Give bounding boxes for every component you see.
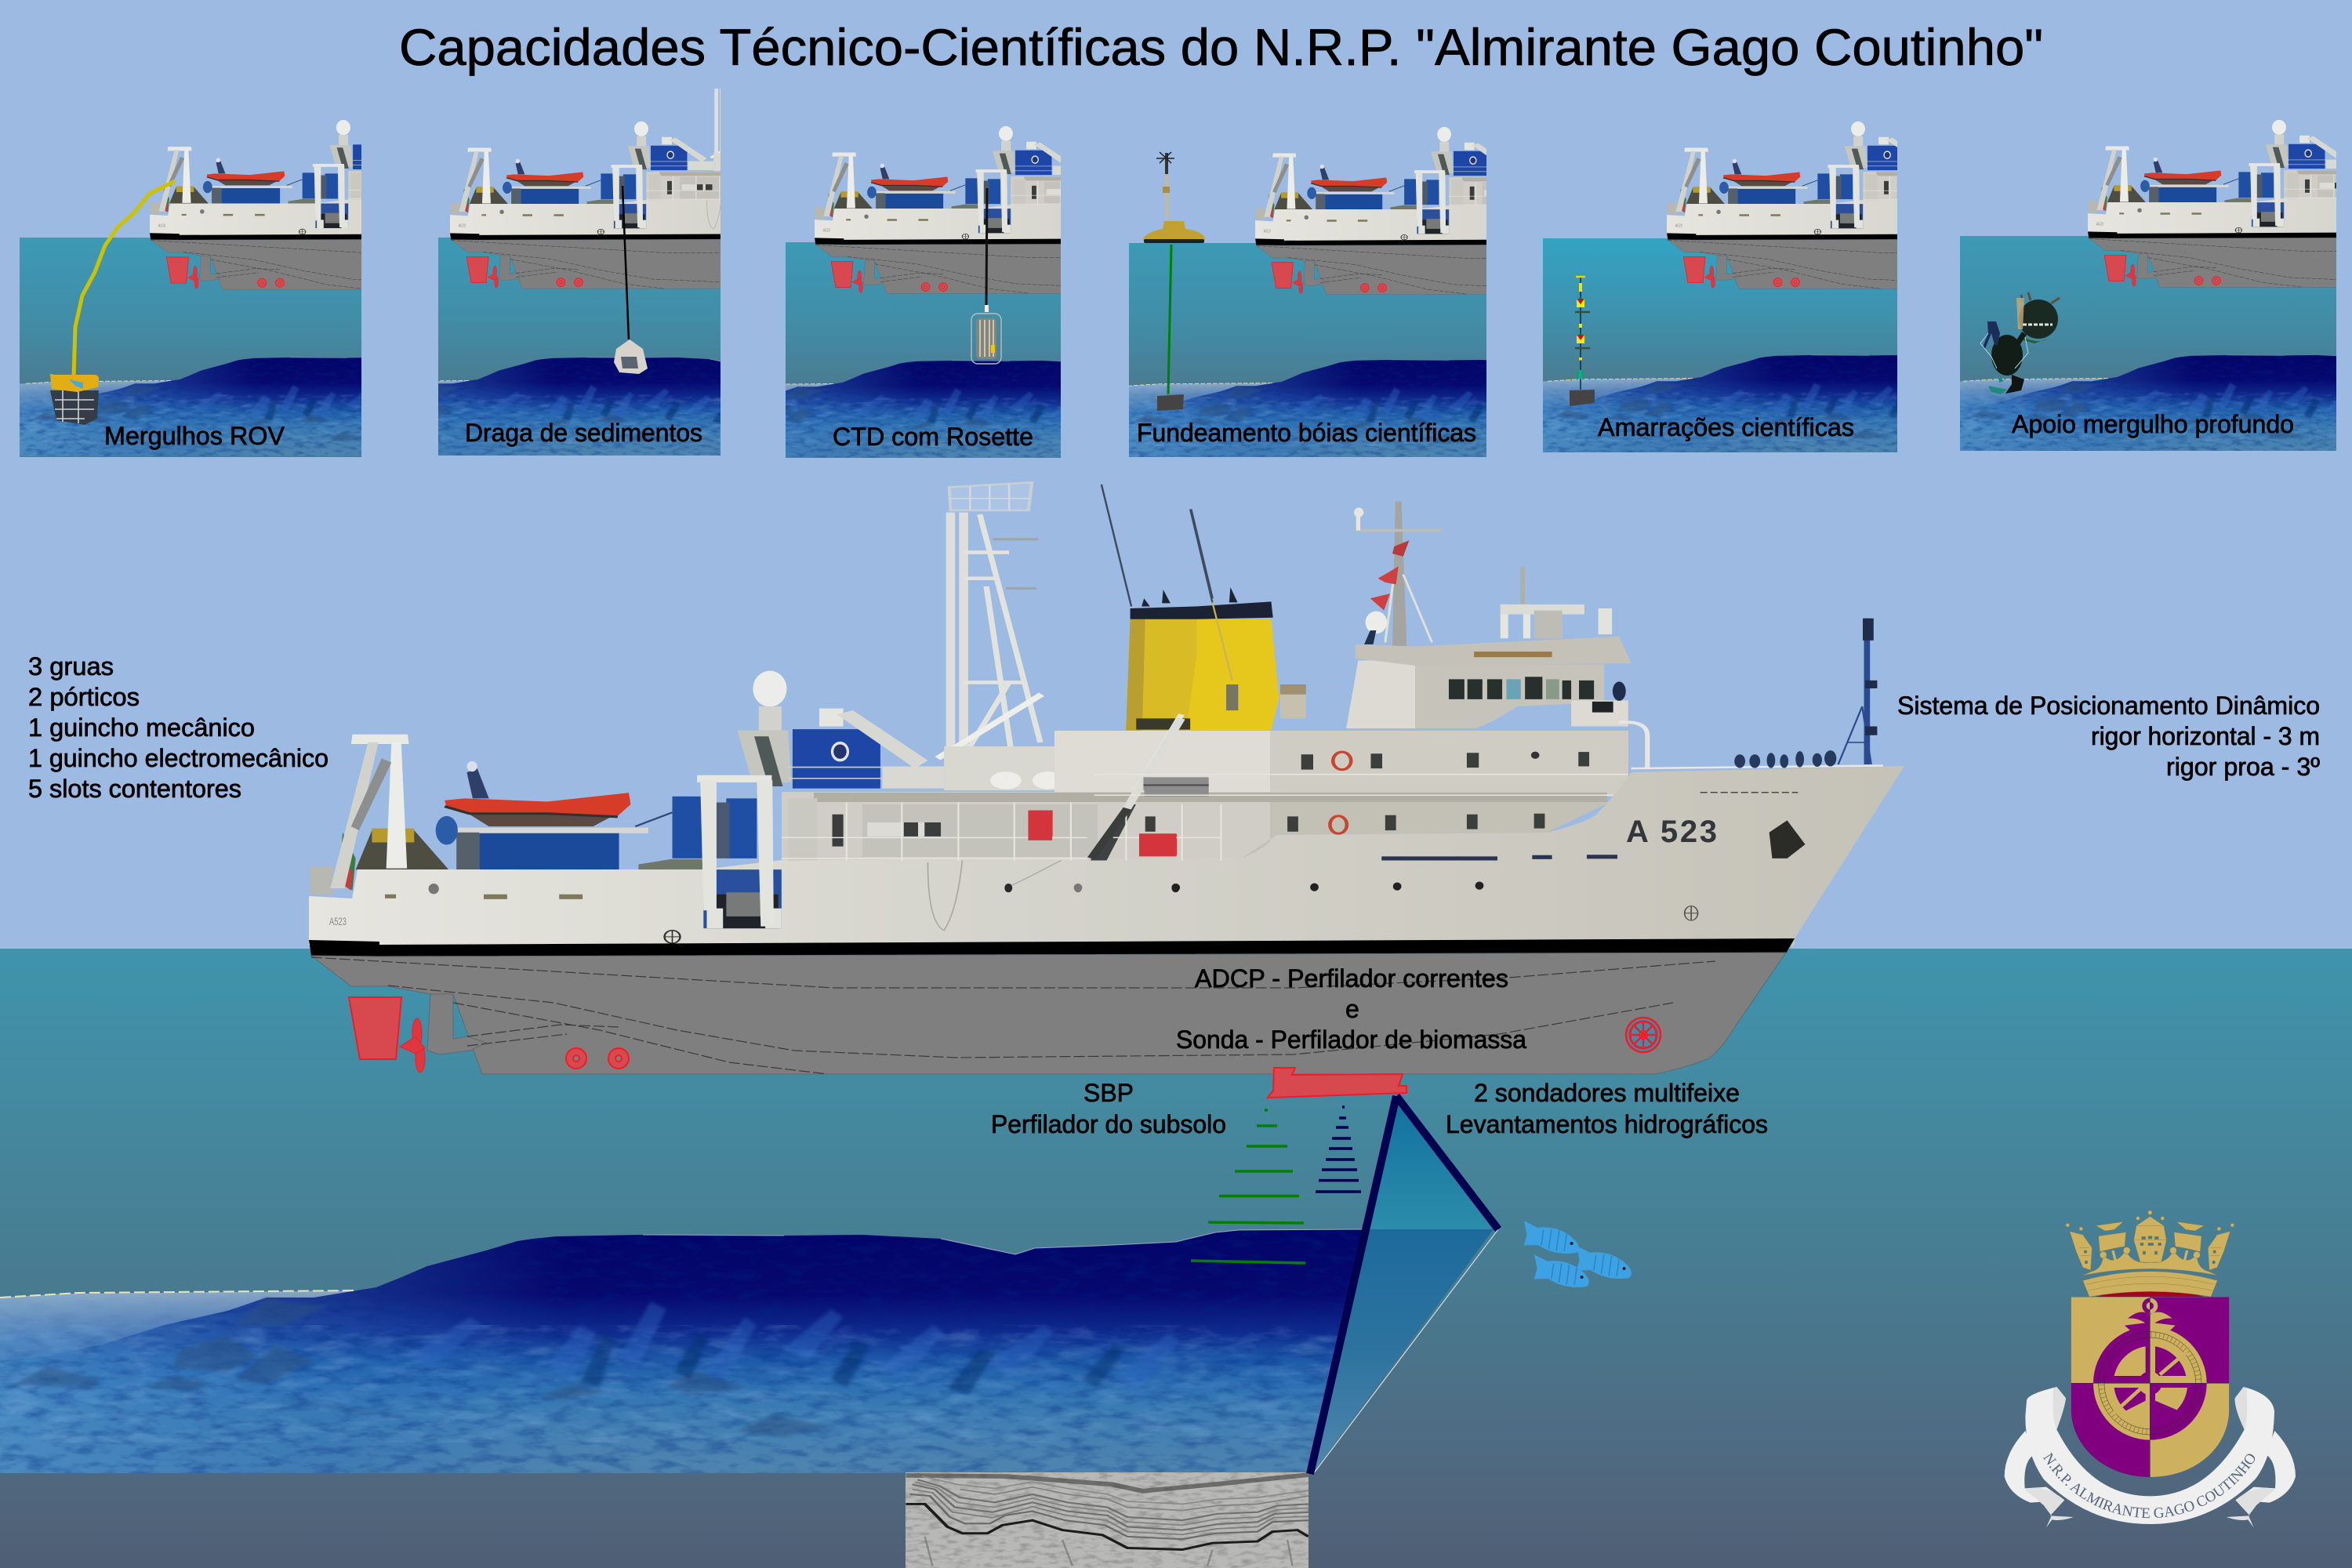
text block: SBP bbox=[991, 1079, 1226, 1138]
text block: SBP: Perfilador do subsolo bbox=[991, 1110, 1226, 1138]
panel label: Apoio mergulho profundo bbox=[2012, 410, 2294, 438]
icon: yellow ROV umbilical bbox=[74, 181, 175, 376]
main ship with hull and superstructure bbox=[309, 482, 1904, 1074]
emblem: ship coat of arms bbox=[2004, 1210, 2296, 1527]
bow thruster bbox=[1626, 1018, 1661, 1052]
text block: deck equipment list: 5 slots contentores bbox=[28, 775, 241, 803]
icon: sediment grab bbox=[614, 339, 648, 374]
panel: CTD com Rosette bbox=[786, 125, 1061, 458]
biomass sonar pulses (navy) bbox=[1316, 1107, 1361, 1192]
icon: anchor weight bbox=[1157, 394, 1184, 411]
stern name A523: A523 bbox=[329, 915, 347, 927]
rudder bbox=[349, 997, 401, 1059]
naval crown bbox=[2066, 1210, 2234, 1297]
icon: ROV vehicle bbox=[50, 374, 99, 425]
icon: instrumented mooring line bbox=[1575, 276, 1590, 390]
panel: Mergulhos ROV bbox=[20, 120, 361, 457]
RIB boat and stern deck gear bbox=[470, 815, 615, 826]
text block: dynamic positioning: Sistema de Posicionamento Dinâmico bbox=[1897, 691, 2320, 720]
text block: ADCP and biomass sonar: e bbox=[1345, 995, 1359, 1023]
icon: CTD wire bbox=[986, 188, 987, 306]
text block: multibeam sounders: Levantamentos hidrográficos bbox=[1446, 1110, 1768, 1138]
text block: deck equipment list: 2 pórticos bbox=[28, 683, 140, 711]
text block: multibeam sounders bbox=[1446, 1079, 1768, 1138]
icon: divers with mine bbox=[1980, 292, 2060, 394]
propeller bbox=[400, 1018, 425, 1073]
underwater hull bbox=[311, 953, 1786, 1074]
panel label: CTD com Rosette bbox=[833, 423, 1033, 451]
sonar pod bbox=[1268, 1068, 1406, 1098]
shield quartered gold and purple bbox=[2071, 1297, 2229, 1477]
text block: dynamic positioning: rigor horizontal - 3 m bbox=[2091, 722, 2320, 750]
hull construction lines bbox=[311, 957, 1715, 1074]
stern thrusters bbox=[566, 1048, 629, 1069]
stern A-frame gantry bbox=[351, 735, 409, 744]
icon: scientific buoy bbox=[1143, 152, 1205, 243]
panel label: Amarrações científicas bbox=[1598, 413, 1854, 441]
fish shoal bbox=[1520, 1221, 1634, 1290]
title: Capacidades Técnico-Científicas do N.R.P. "Almirante Gago Coutinho" bbox=[399, 18, 2043, 76]
text block: ADCP and biomass sonar bbox=[1176, 964, 1526, 1054]
panel label: Draga de sedimentos bbox=[465, 419, 702, 447]
text block: SBP: SBP bbox=[1083, 1079, 1134, 1107]
hull number A 523: A 523 bbox=[1626, 815, 1717, 849]
text block: dynamic positioning bbox=[1897, 691, 2320, 781]
icon: mooring line bbox=[1168, 245, 1171, 394]
after containers and second gantry bbox=[673, 797, 703, 858]
icon: anchor weight bbox=[1570, 390, 1595, 406]
text block: deck equipment list bbox=[28, 652, 328, 803]
seismic sub-bottom profile image bbox=[906, 1472, 1308, 1568]
icon: CTD rosette bbox=[971, 305, 1001, 364]
main seafloor bathymetry bbox=[0, 1223, 1411, 1474]
scroll motto: N.R.P. ALMIRANTE GAGO COUTINHO bbox=[2043, 1452, 2255, 1518]
text block: multibeam sounders: 2 sondadores multifeixe bbox=[1474, 1079, 1740, 1107]
superstructure blocks bbox=[1054, 731, 1286, 793]
scroll ribbon bbox=[2005, 1387, 2296, 1527]
multibeam swath bbox=[1310, 1096, 1498, 1474]
icon: dredge wire bbox=[622, 186, 629, 339]
black boot-top band bbox=[309, 938, 1795, 956]
panel: Apoio mergulho profundo bbox=[1960, 119, 2336, 451]
funnel, bridge and forward masts bbox=[1126, 502, 1647, 768]
propeller shaft strut bbox=[427, 994, 486, 1054]
text block: deck equipment list: 1 guincho electromecânico bbox=[28, 744, 328, 772]
text block: deck equipment list: 3 gruas bbox=[28, 652, 114, 681]
text block: ADCP and biomass sonar: ADCP - Perfilador correntes bbox=[1195, 964, 1508, 993]
SBP acoustic pulses (green) bbox=[1191, 1110, 1305, 1263]
panel label: Mergulhos ROV bbox=[104, 422, 285, 450]
panel: Amarrações científicas bbox=[1543, 121, 1897, 452]
hull topsides bbox=[309, 766, 1904, 946]
text block: dynamic positioning: rigor proa - 3º bbox=[2166, 753, 2320, 781]
text block: deck equipment list: 1 guincho mecânico bbox=[28, 713, 255, 742]
details on superstructure and hull bbox=[385, 714, 1221, 943]
text block: ADCP and biomass sonar: Sonda - Perfilador de biomassa bbox=[1176, 1025, 1526, 1054]
panel label: Fundeamento bóias científicas bbox=[1137, 419, 1476, 447]
stern and mid details, upper bbox=[310, 482, 1213, 895]
main sea water bbox=[0, 949, 2352, 1568]
panel: Draga de sedimentos bbox=[438, 89, 720, 456]
panel: Fundeamento bóias científicas bbox=[1129, 127, 2023, 457]
astrolabe counterchanged bbox=[2071, 1297, 2229, 1477]
